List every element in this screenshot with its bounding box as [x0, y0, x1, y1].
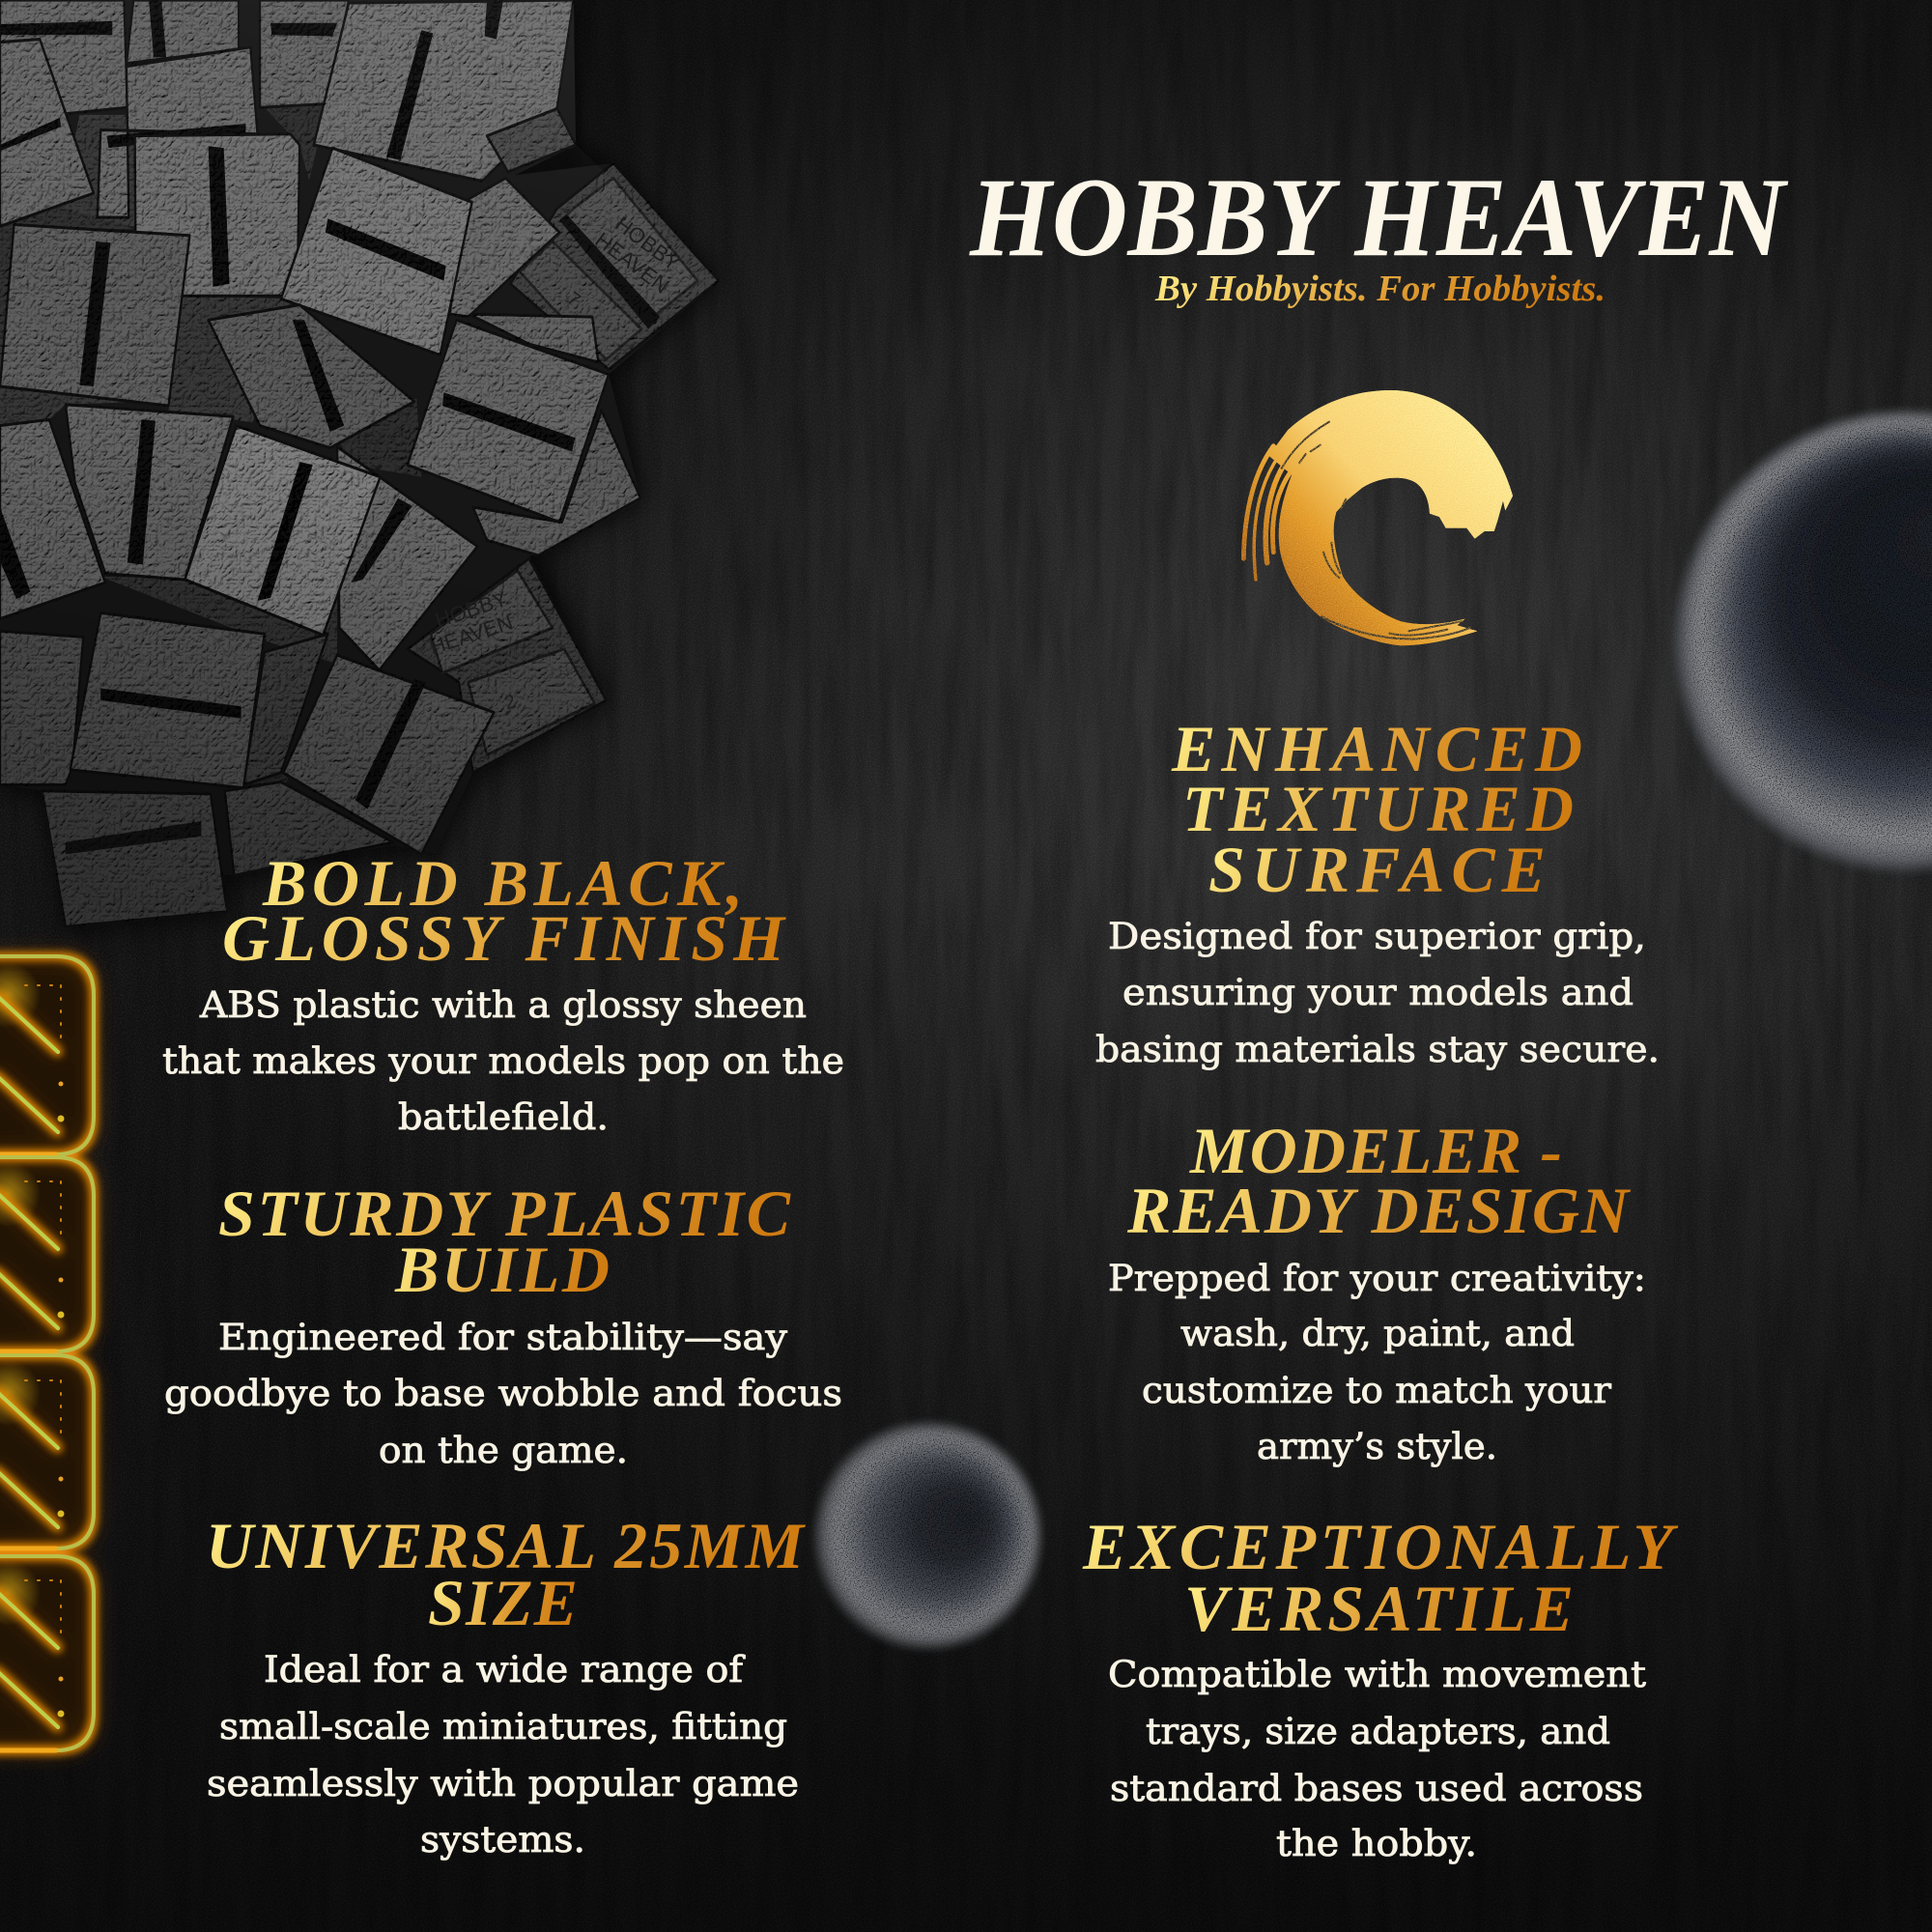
base: filler shadows between plates [0, 102, 421, 797]
base: bottom row left [43, 791, 227, 926]
logo imprint: upper tray [563, 212, 685, 311]
feature: enhanced textured surface [1095, 712, 1660, 1070]
body text: Engineered for stability—say [218, 1317, 787, 1358]
base: upper left [0, 40, 94, 226]
base: bottom right [283, 655, 494, 854]
base: left textured [0, 224, 189, 406]
panel: left column features [162, 846, 844, 1861]
feature: modeler-ready design [1108, 1114, 1646, 1467]
logo imprint: upper tray: HEAVEN [591, 227, 674, 298]
base: top row right slab [260, 0, 349, 107]
base: middle right flat [469, 314, 598, 362]
base: centre under [209, 305, 414, 448]
icon: gold enso brush circle logo [1243, 390, 1513, 645]
logo imprint: upper tray: 7 [563, 288, 584, 311]
heading: READY DESIGN [1126, 1174, 1632, 1247]
base: right of centre [337, 446, 477, 670]
logo imprint: lower tray [427, 586, 519, 714]
body text: Prepped for your creativity: [1108, 1258, 1646, 1299]
heading: VERSATILE [1184, 1572, 1574, 1645]
heading [222, 846, 786, 975]
heading: EXCEPTIONALLY [1082, 1510, 1678, 1583]
logo imprint: upper tray: HOBBY [611, 212, 685, 275]
body text: ensuring your models and [1122, 972, 1634, 1013]
heading [1171, 712, 1582, 906]
body text: wash, dry, paint, and [1180, 1313, 1575, 1354]
body text: seamlessly with popular game [207, 1763, 799, 1804]
tile 4 [0, 1556, 94, 1750]
body text: systems. [420, 1819, 585, 1861]
base: upper centre [135, 134, 299, 296]
body text: battlefield. [398, 1096, 609, 1138]
body text [1095, 916, 1660, 1070]
logo imprint: lower tray: HEAVEN [427, 610, 516, 659]
body text: Compatible with movement [1108, 1654, 1646, 1695]
tile 1 [0, 956, 94, 1154]
body text: small-scale miniatures, fitting [219, 1706, 787, 1747]
base: mid left [66, 405, 233, 580]
tray: lower logo [408, 558, 607, 773]
logo imprint: lower tray: HOBBY [432, 586, 510, 633]
tile indicator dots [25, 985, 64, 1718]
base: top left [0, 0, 128, 115]
heading: BUILD [394, 1233, 610, 1306]
base: bottom centre left [71, 612, 265, 788]
heading: SURFACE [1208, 833, 1546, 906]
image: pile of textured square plastic bases [0, 0, 724, 933]
body text: customize to match your [1142, 1370, 1611, 1411]
base: far left [0, 419, 105, 619]
body text: the hobby. [1276, 1823, 1477, 1864]
body text: basing materials stay secure. [1095, 1029, 1660, 1070]
body text: standard bases used across [1110, 1768, 1643, 1809]
blurred sphere: right edge [1675, 412, 1932, 872]
heading: TEXTURED [1182, 772, 1574, 845]
base: top row slab [127, 0, 239, 64]
feature: sturdy plastic build [164, 1177, 842, 1471]
title: HOBBY HEAVEN [969, 156, 1788, 280]
tile 2 [0, 1157, 94, 1351]
body text: that makes your models pop on the [162, 1040, 844, 1082]
feature: bold black glossy finish [162, 846, 844, 1138]
heading: STURDY PLASTIC [218, 1177, 791, 1250]
heading [1126, 1114, 1632, 1247]
base: small diagonal [449, 178, 559, 317]
body text: Ideal for a wide range of [264, 1649, 745, 1690]
body text: on the game. [379, 1430, 628, 1471]
body text [1108, 1654, 1646, 1864]
body text: army’s style. [1257, 1426, 1497, 1467]
blurred sphere: lower centre [815, 1424, 1039, 1648]
body text [1108, 1258, 1646, 1467]
base: right lower under [473, 411, 640, 555]
neon chevron tiles on the left edge [0, 956, 94, 1750]
heading: SIZE [428, 1566, 578, 1639]
body text: trays, size adapters, and [1146, 1711, 1610, 1752]
logo imprint: lower tray: 2 [501, 691, 519, 714]
base: bright centre [185, 426, 381, 636]
heading: MODELER - [1189, 1114, 1562, 1187]
base: right large [408, 320, 609, 523]
body text [164, 1317, 842, 1471]
base: top right corner [487, 108, 576, 172]
tray: underside with logo top [510, 163, 719, 369]
heading: UNIVERSAL 25MM [206, 1509, 807, 1582]
panel: right column features [1082, 712, 1678, 1864]
base: central large [281, 148, 472, 355]
tile 3 [0, 1355, 94, 1548]
heading: BOLD BLACK, [262, 846, 743, 920]
body text: Designed for superior grip, [1108, 916, 1646, 957]
base: under lower centre [243, 634, 327, 784]
heading [218, 1177, 791, 1306]
body text: ABS plastic with a glossy sheen [199, 984, 807, 1026]
base: bottom left far [0, 631, 83, 784]
base: large top right [314, 0, 574, 182]
base: bottom row right [225, 781, 393, 875]
feature: universal 25mm size [206, 1509, 807, 1861]
feature: exceptionally versatile [1082, 1510, 1678, 1864]
heading [1082, 1510, 1678, 1645]
heading: GLOSSY FINISH [222, 901, 786, 975]
tagline: By Hobbyists. For Hobbyists. [1154, 269, 1605, 309]
body text [207, 1649, 799, 1861]
base: behind centre [98, 47, 258, 217]
body text [162, 984, 844, 1138]
body text: goodbye to base wobble and focus [164, 1373, 842, 1414]
heading: ENHANCED [1171, 712, 1582, 785]
heading [206, 1509, 807, 1639]
